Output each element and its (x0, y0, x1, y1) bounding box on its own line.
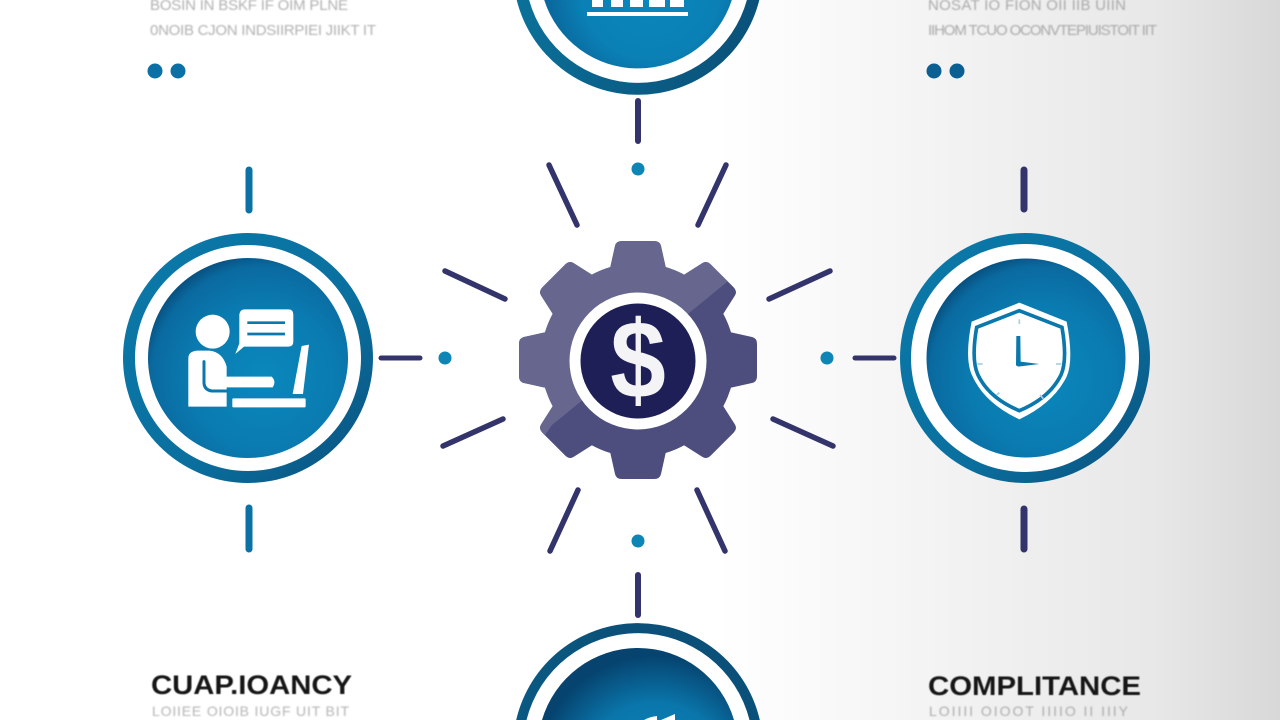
caption: right: LOIIII OIOOT IIIIO II IIIY (929, 703, 1129, 719)
text block: top right (928, 0, 1157, 39)
rays around gear (443, 165, 833, 551)
text block: top left: 0NOIB CJON INDSIIRPIEI JIIKT IT (150, 22, 376, 39)
icon: columns (587, 0, 688, 16)
left vertical ticks (246, 170, 252, 549)
icon: shield with clock (968, 303, 1070, 419)
top badge: bar chart (517, 0, 759, 95)
dots: top right (926, 64, 964, 78)
caption: left: LOIIEE OIOIB IUGF UIT BIT (152, 703, 349, 719)
text block: top left (150, 0, 376, 39)
top connector (632, 101, 644, 176)
central gear with dollar (519, 241, 757, 479)
heading: left: CUAP.IOANCY (151, 670, 352, 700)
heading: right: COMPLITANCE (928, 671, 1141, 701)
left connector (381, 352, 452, 364)
text block: top right: IIHOM TCUO OCONVTEPIUISTOIT IIT (928, 22, 1157, 39)
right connector (820, 352, 894, 364)
right badge: compliance (900, 233, 1150, 483)
bottom connector (632, 534, 644, 615)
right vertical ticks (1020, 170, 1028, 549)
dots: top left (148, 64, 186, 78)
icon: partial white shape (644, 714, 675, 720)
left badge: consultancy (123, 233, 373, 483)
icon: person at laptop with speech bubble (188, 309, 309, 407)
gear body (519, 241, 757, 479)
dollar sign: $ (610, 299, 666, 422)
bottom badge (516, 623, 760, 720)
